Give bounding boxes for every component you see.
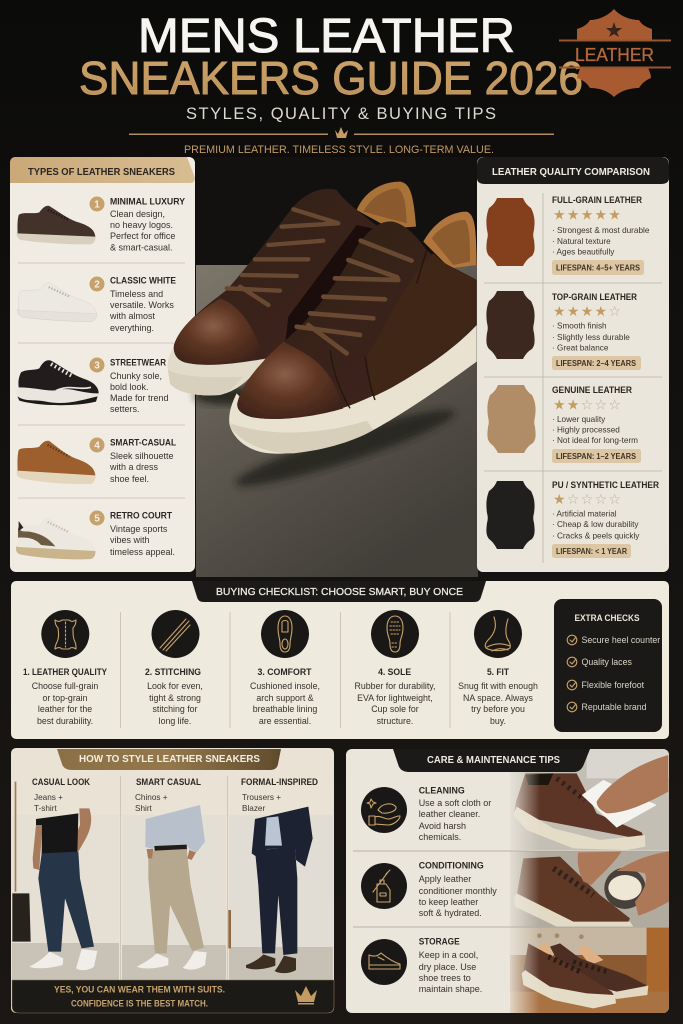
- heading: how to style: HOW TO STYLE LEATHER SNEAKERS: [79, 754, 260, 765]
- item 1: minimal luxury: Perfect for office: [110, 231, 175, 241]
- icon: outsole: [371, 610, 419, 658]
- care photos: [505, 748, 670, 1015]
- item 4: smart-casual: Sleek silhouette: [110, 451, 174, 461]
- photo: storage with shoe trees: [510, 928, 670, 1015]
- item 2: classic white: versatile. Works: [110, 300, 174, 310]
- heading: how to style: [57, 749, 281, 770]
- photo: cleaning shoe: [510, 748, 670, 850]
- callout: wear with suits: CONFIDENCE IS THE BEST MATCH.: [71, 998, 208, 1008]
- item 5: retro court: RETRO COURT: [110, 510, 173, 520]
- extra checks box: EXTRA CHECKS: [574, 613, 640, 623]
- row: top-grain leather: · Great balance: [552, 344, 609, 352]
- back shoe: [167, 182, 416, 395]
- row: full-grain leather: [486, 195, 650, 275]
- tip: cleaning: leather cleaner.: [419, 809, 480, 819]
- heading: types of leather sneakers: TYPES OF LEATHER SNEAKERS: [28, 167, 175, 178]
- column: smart casual: Shirt: [135, 804, 153, 813]
- lifespan pill: LIFESPAN: 1–2 YEARS: [556, 452, 637, 461]
- panel: types of leather sneakers: [10, 157, 195, 572]
- check 5: fit: Snug fit with enough: [458, 681, 538, 691]
- title block: [79, 10, 583, 156]
- item 3: streetwear: Chunky sole,: [110, 371, 162, 381]
- shoe: tan: [17, 441, 95, 484]
- tip: conditioning: [361, 860, 497, 918]
- shoe: black chunky: [17, 360, 99, 405]
- row: genuine leather: · Not ideal for long-term: [552, 436, 638, 445]
- check 5: fit: try before you: [471, 704, 525, 714]
- item 1: minimal luxury: no heavy logos.: [110, 220, 173, 230]
- icon: conditioner bottle: [361, 863, 407, 909]
- icon: leather hide: [41, 610, 89, 658]
- column: casual look: T-shirt: [34, 804, 57, 813]
- item 2: classic white: with almost: [109, 311, 156, 321]
- item 3: streetwear: STREETWEAR: [110, 358, 167, 368]
- subtitle: STYLES, QUALITY & BUYING TIPS: [186, 105, 496, 123]
- tip: cleaning: Avoid harsh: [419, 821, 466, 831]
- check 4: sole: 4. SOLE: [378, 667, 411, 677]
- tip: cleaning: CLEANING: [419, 786, 465, 796]
- check 2: stitching: 2. STITCHING: [145, 667, 201, 677]
- extra checks box: Quality laces: [582, 657, 632, 667]
- lifespan pill: LIFESPAN: 2–4 YEARS: [556, 359, 637, 368]
- item 1: minimal luxury: MINIMAL LUXURY: [110, 196, 185, 206]
- check 3: comfort: [250, 610, 320, 726]
- item 3: streetwear: setters.: [110, 404, 140, 414]
- tip: conditioning: CONDITIONING: [419, 860, 484, 870]
- check 5: fit: [458, 610, 538, 726]
- row: genuine leather: ★★☆☆☆: [553, 398, 622, 414]
- check 3: comfort: arch support &: [256, 693, 314, 703]
- check 1: leather quality: or top-grain: [42, 693, 88, 703]
- row: genuine leather: GENUINE LEATHER: [552, 385, 633, 395]
- column: smart casual: Chinos +: [135, 793, 168, 802]
- panel: buying checklist: [11, 581, 669, 739]
- check 2: stitching: Look for even,: [147, 681, 203, 691]
- tip: cleaning: chemicals.: [419, 832, 461, 842]
- title: mens leather: MENS LEATHER: [138, 10, 515, 63]
- item 2: classic white: CLASSIC WHITE: [110, 276, 176, 286]
- item 3: streetwear: [17, 358, 169, 414]
- check 5: fit: 5. FIT: [487, 667, 509, 677]
- row: pu synthetic leather: ★☆☆☆☆: [553, 492, 622, 508]
- check 1: leather quality: best durability.: [37, 716, 93, 726]
- column: casual look: Jeans +: [34, 793, 63, 802]
- check 3: comfort: are essential.: [259, 716, 311, 726]
- callout: wear with suits: [12, 980, 334, 1013]
- swatch: synthetic: [486, 481, 535, 549]
- lifespan pill: LIFESPAN: 4–5+ YEARS: [556, 264, 641, 272]
- row: full-grain leather: · Ages beautifully: [552, 248, 615, 256]
- item 3: streetwear: 3: [94, 360, 100, 372]
- icon: crown: [295, 986, 317, 1004]
- row: top-grain leather: ★★★★☆: [553, 304, 622, 320]
- icon: stitching: [152, 610, 200, 658]
- swatch: genuine: [487, 385, 536, 453]
- check 4: sole: EVA for lightweight,: [357, 693, 433, 703]
- heading: leather quality comparison: LEATHER QUALITY COMPARISON: [492, 167, 650, 178]
- shoe: retro white: [16, 518, 95, 559]
- tip: conditioning: soft & hydrated.: [419, 908, 482, 918]
- item 5: retro court: timeless appeal.: [110, 547, 175, 557]
- tip: storage: dry place. Use: [419, 962, 476, 972]
- icon: insole: [261, 610, 309, 658]
- title: sneakers guide 2026: SNEAKERS GUIDE 2026: [79, 52, 583, 104]
- lifespan pill: [552, 449, 641, 463]
- heading: leather quality comparison: [477, 157, 669, 184]
- check 2: stitching: long life.: [159, 716, 191, 726]
- item 1: minimal luxury: [17, 196, 185, 252]
- tip: storage: maintain shape.: [419, 984, 482, 994]
- swatch: full-grain: [486, 198, 535, 266]
- item 1: minimal luxury: & smart-casual.: [110, 242, 173, 252]
- row: top-grain leather: · Smooth finish: [552, 322, 607, 330]
- column: smart casual: SMART CASUAL: [136, 777, 202, 787]
- swatch: top-grain: [486, 291, 535, 359]
- tip: storage: [361, 936, 482, 994]
- row: full-grain leather: FULL-GRAIN LEATHER: [552, 195, 643, 205]
- row: genuine leather: · Highly processed: [552, 426, 620, 434]
- tip: conditioning: Apply leather: [419, 874, 471, 884]
- item 4: smart-casual: [17, 438, 177, 484]
- item 5: retro court: vibes with: [110, 535, 150, 545]
- outfit photos: [12, 815, 333, 980]
- row: full-grain leather: · Strongest & most durable: [552, 226, 650, 235]
- item 2: classic white: 2: [94, 280, 100, 290]
- tip: storage: shoe trees to: [419, 973, 471, 983]
- check 1: leather quality: Choose full-grain: [32, 681, 98, 691]
- item 3: streetwear: bold look.: [110, 382, 149, 392]
- heading: care and maintenance tips: CARE & MAINTENANCE TIPS: [427, 755, 560, 766]
- item 5: retro court: Vintage sports: [110, 524, 168, 534]
- check 4: sole: Cup sole for: [371, 704, 419, 714]
- icon: cleaning hands: [361, 787, 407, 833]
- check 1: leather quality: leather for the: [38, 704, 92, 714]
- column: formal-inspired: [228, 777, 318, 973]
- check 2: stitching: stitching for: [153, 704, 198, 714]
- item 2: classic white: Timeless and: [110, 289, 163, 299]
- icon: foot: [474, 610, 522, 658]
- figure: trousers and blazer: [228, 807, 313, 973]
- extra checks box: Flexible forefoot: [582, 680, 645, 690]
- shoe: white: [18, 283, 96, 321]
- row: top-grain leather: · Slightly less durable: [552, 333, 630, 342]
- check 4: sole: Rubber for durability,: [354, 681, 436, 691]
- check 3: comfort: breathable lining: [253, 704, 317, 714]
- figure: chinos and shirt: [137, 805, 207, 970]
- row: pu synthetic leather: · Cracks & peels quickly: [552, 532, 640, 540]
- lifespan pill: LIFESPAN: < 1 YEAR: [556, 547, 627, 556]
- extra checks box: Reputable brand: [582, 702, 647, 712]
- heading: buying checklist: [192, 581, 486, 602]
- item 4: smart-casual: with a dress: [109, 462, 159, 472]
- tip: conditioning: conditioner monthly: [419, 886, 497, 896]
- lifespan pill: [552, 356, 641, 370]
- heading: types of leather sneakers: [10, 157, 195, 183]
- check 1: leather quality: [23, 610, 107, 726]
- extra checks box: Secure heel counter: [582, 635, 660, 645]
- item 1: minimal luxury: 1: [94, 200, 100, 210]
- row: top-grain leather: [486, 291, 641, 370]
- check 4: sole: [354, 610, 436, 726]
- row: pu synthetic leather: · Cheap & low durability: [552, 520, 639, 529]
- item 4: smart-casual: 4: [94, 440, 100, 452]
- shoe: dark brown: [17, 206, 95, 244]
- lifespan pill: [552, 260, 644, 275]
- extra checks box: [554, 599, 662, 732]
- item 4: smart-casual: SMART-CASUAL: [110, 438, 177, 448]
- tip: cleaning: Use a soft cloth or: [419, 798, 491, 808]
- check 3: comfort: Cushioned insole,: [250, 681, 320, 691]
- row: pu synthetic leather: PU / SYNTHETIC LEATHER: [552, 480, 660, 490]
- front shoe: [229, 212, 477, 454]
- column: casual look: [12, 777, 97, 970]
- row: full-grain leather: ★★★★★: [553, 208, 622, 224]
- icon: sneaker outline: [361, 939, 407, 985]
- check 4: sole: structure.: [377, 716, 413, 726]
- hero photo: brown leather sneakers: [167, 157, 478, 577]
- column: formal-inspired: Trousers +: [242, 793, 281, 802]
- tip: storage: STORAGE: [419, 936, 460, 946]
- check 2: stitching: tight & strong: [149, 693, 201, 703]
- column: formal-inspired: Blazer: [242, 804, 265, 813]
- badge: leather stamp: [559, 9, 671, 97]
- check 1: leather quality: 1. LEATHER QUALITY: [23, 667, 107, 677]
- check 5: fit: buy.: [490, 716, 506, 726]
- item 2: classic white: everything.: [110, 323, 154, 333]
- panel: leather quality comparison: [477, 157, 669, 572]
- item 2: classic white: [18, 276, 176, 333]
- row: full-grain leather: · Natural texture: [552, 237, 611, 246]
- item 5: retro court: 5: [94, 514, 100, 524]
- tagline: PREMIUM LEATHER. TIMELESS STYLE. LONG-TERM VALUE.: [184, 144, 494, 156]
- row: top-grain leather: TOP-GRAIN LEATHER: [552, 292, 638, 302]
- heading: care and maintenance tips: [393, 749, 590, 772]
- tip: conditioning: to keep leather: [419, 897, 478, 907]
- item 1: minimal luxury: Clean design,: [110, 209, 165, 219]
- crown divider: [129, 127, 554, 138]
- row: pu synthetic leather: [486, 480, 660, 558]
- row: pu synthetic leather: · Artificial material: [552, 510, 617, 518]
- check 2: stitching: [145, 610, 203, 726]
- column: smart casual: [135, 777, 207, 970]
- callout: wear with suits: YES, YOU CAN WEAR THEM WITH SUITS.: [54, 984, 225, 994]
- photo: conditioning shoe: [510, 851, 670, 927]
- item 5: retro court: [16, 510, 175, 559]
- badge: leather stamp: LEATHER: [575, 45, 654, 65]
- lifespan pill: [552, 544, 631, 558]
- panel: care and maintenance tips: [346, 748, 670, 1015]
- column: casual look: CASUAL LOOK: [32, 777, 91, 787]
- check 5: fit: NA space. Always: [463, 693, 534, 703]
- row: genuine leather: [487, 385, 641, 463]
- tip: storage: Keep in a cool,: [419, 950, 478, 960]
- item 4: smart-casual: shoe feel.: [110, 474, 149, 484]
- column: formal-inspired: FORMAL-INSPIRED: [241, 777, 318, 787]
- heading: buying checklist: BUYING CHECKLIST: CHOOSE SMART, BUY ONCE: [216, 587, 463, 598]
- row: genuine leather: · Lower quality: [552, 415, 606, 424]
- figure: jeans and t-shirt: [12, 782, 97, 970]
- panel: how to style leather sneakers: [11, 748, 334, 1013]
- tip: cleaning: [361, 786, 491, 842]
- check 3: comfort: 3. COMFORT: [258, 667, 312, 677]
- item 3: streetwear: Made for trend: [110, 393, 169, 403]
